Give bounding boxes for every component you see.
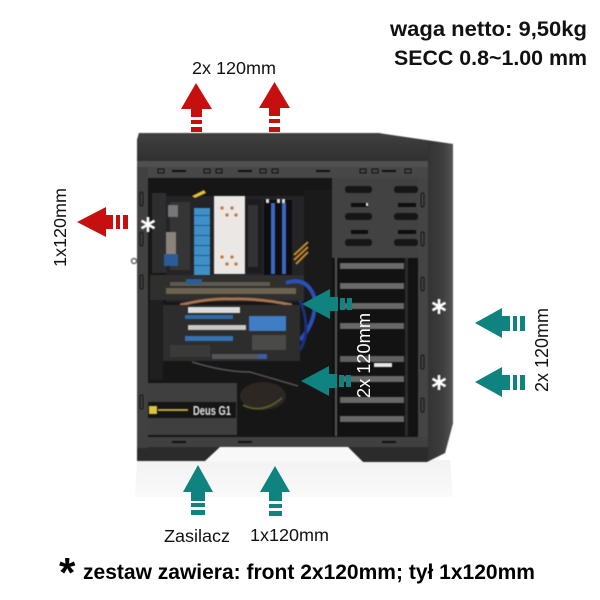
weight and material specs: SECC 0.8~1.00 mm [394, 46, 587, 70]
drive bay cage lower [332, 258, 418, 436]
computer case [132, 133, 453, 462]
cooler fan [245, 199, 262, 273]
rear fan [152, 193, 166, 273]
PSU cable bundle [240, 382, 286, 410]
footnote asterisk: * [59, 549, 76, 596]
footnote [59, 549, 535, 596]
label: front fans: 2x 120mm [532, 308, 552, 392]
power supply: Deus G1 [193, 404, 231, 418]
blue heatsink [194, 208, 210, 275]
wires [192, 362, 298, 386]
weight and material specs [389, 17, 587, 70]
CPU cooler [214, 196, 245, 274]
RAM slots [264, 199, 292, 275]
white floor notch under case [205, 448, 363, 462]
label: rear fan: 1x120mm [50, 188, 70, 267]
left frame [132, 167, 148, 448]
arrow: front intake upper [475, 308, 525, 338]
arrow: bottom intake PSU [183, 465, 213, 515]
label: power supply: Zasilacz [164, 526, 230, 546]
right frame [418, 178, 428, 438]
weight and material specs: waga netto: 9,50kg [389, 17, 587, 41]
cable compartment [304, 190, 332, 300]
arrow: bottom intake fan [260, 466, 290, 516]
arrow: front intake lower [475, 367, 525, 397]
label: inner front fans: 2x 120mm [354, 313, 374, 398]
blue cable [286, 281, 315, 340]
label: bottom fan: 1x120mm [250, 525, 329, 545]
white asterisk front upper [432, 299, 446, 314]
front bezel [428, 141, 453, 461]
interior [148, 178, 418, 438]
motherboard lower with expansion slots [163, 305, 300, 361]
rear expansion frame [150, 300, 163, 380]
arrow: top exhaust left [181, 83, 212, 132]
floor reflection [135, 460, 453, 497]
blue chipset heatsink [249, 316, 286, 331]
white asterisk front lower [432, 375, 446, 390]
yellow connector [192, 190, 206, 198]
arrow: rear exhaust [77, 207, 128, 237]
copper heat pipes [180, 299, 292, 305]
white asterisk rear [142, 217, 154, 232]
power supply [148, 383, 237, 435]
motherboard upper [150, 190, 304, 302]
yellow and red cables [294, 242, 308, 264]
drive bay plate upper [332, 178, 418, 258]
arrow: inner intake lower [301, 366, 351, 396]
case body silhouette [137, 133, 453, 462]
footnote: zestaw zawiera: front 2x120mm; tył 1x120mm [83, 561, 535, 584]
top panel [137, 133, 428, 161]
arrow: inner intake upper [302, 289, 352, 319]
bottom frame strip [137, 437, 428, 447]
arrow: top exhaust right [259, 82, 290, 132]
label: top fans: 2x 120mm [192, 58, 276, 78]
top frame strip [137, 161, 428, 178]
